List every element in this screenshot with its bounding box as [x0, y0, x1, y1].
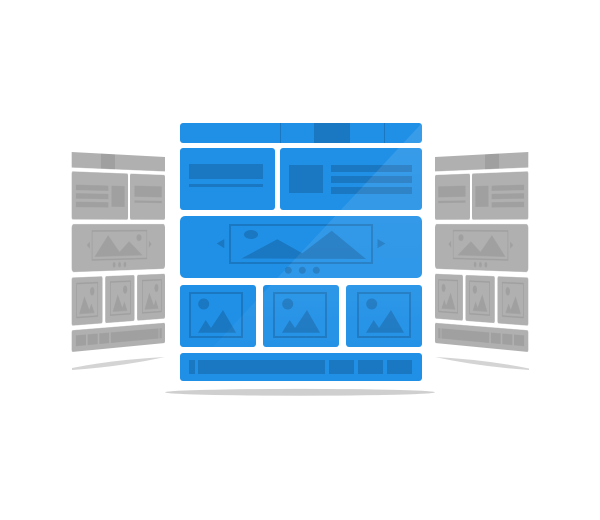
right page image thumbnail 2	[465, 275, 495, 323]
right page image slider	[435, 224, 528, 272]
diagonal gloss highlight	[238, 124, 422, 322]
side page: left wireframe	[72, 152, 165, 352]
right page floor shadow	[435, 357, 529, 370]
slider image mountains	[242, 231, 366, 259]
left page media panel	[72, 171, 128, 220]
right page media panel	[472, 171, 528, 220]
slider image sun	[244, 230, 258, 239]
right page image thumbnail 3	[498, 276, 528, 326]
active nav tab	[314, 123, 350, 143]
left page small text panel	[130, 174, 165, 220]
right page image thumbnail 1	[435, 274, 463, 321]
slider next arrow	[378, 239, 385, 248]
media square	[289, 165, 323, 193]
side page: right wireframe	[435, 152, 528, 352]
left page floor shadow	[72, 357, 165, 370]
image thumbnail 1	[180, 285, 256, 347]
image slider panel	[180, 216, 422, 278]
small text panel	[180, 148, 275, 210]
slider pagination dots	[285, 267, 320, 274]
slider previous arrow	[217, 239, 224, 248]
left page nav bar	[72, 152, 165, 171]
slider image frame	[230, 225, 372, 263]
media panel	[280, 148, 422, 210]
left page image thumbnail 3	[72, 276, 102, 326]
left page image slider	[72, 224, 165, 272]
nav bar	[180, 123, 422, 143]
nav dividers	[280, 123, 385, 143]
panel subtitle line	[189, 184, 263, 187]
media text lines	[331, 165, 412, 194]
left page image thumbnail 2	[105, 275, 135, 323]
image thumbnail 2	[263, 285, 339, 347]
right page small text panel	[435, 174, 470, 220]
footer bar	[180, 353, 422, 381]
panel heading block	[189, 164, 263, 179]
image thumbnail 3	[346, 285, 422, 347]
right page footer bar	[435, 323, 528, 352]
center page illustration	[72, 123, 529, 396]
center page floor shadow	[165, 389, 435, 396]
right page nav bar	[435, 152, 528, 171]
left page image thumbnail 1	[137, 274, 165, 321]
left page footer bar	[72, 323, 165, 352]
